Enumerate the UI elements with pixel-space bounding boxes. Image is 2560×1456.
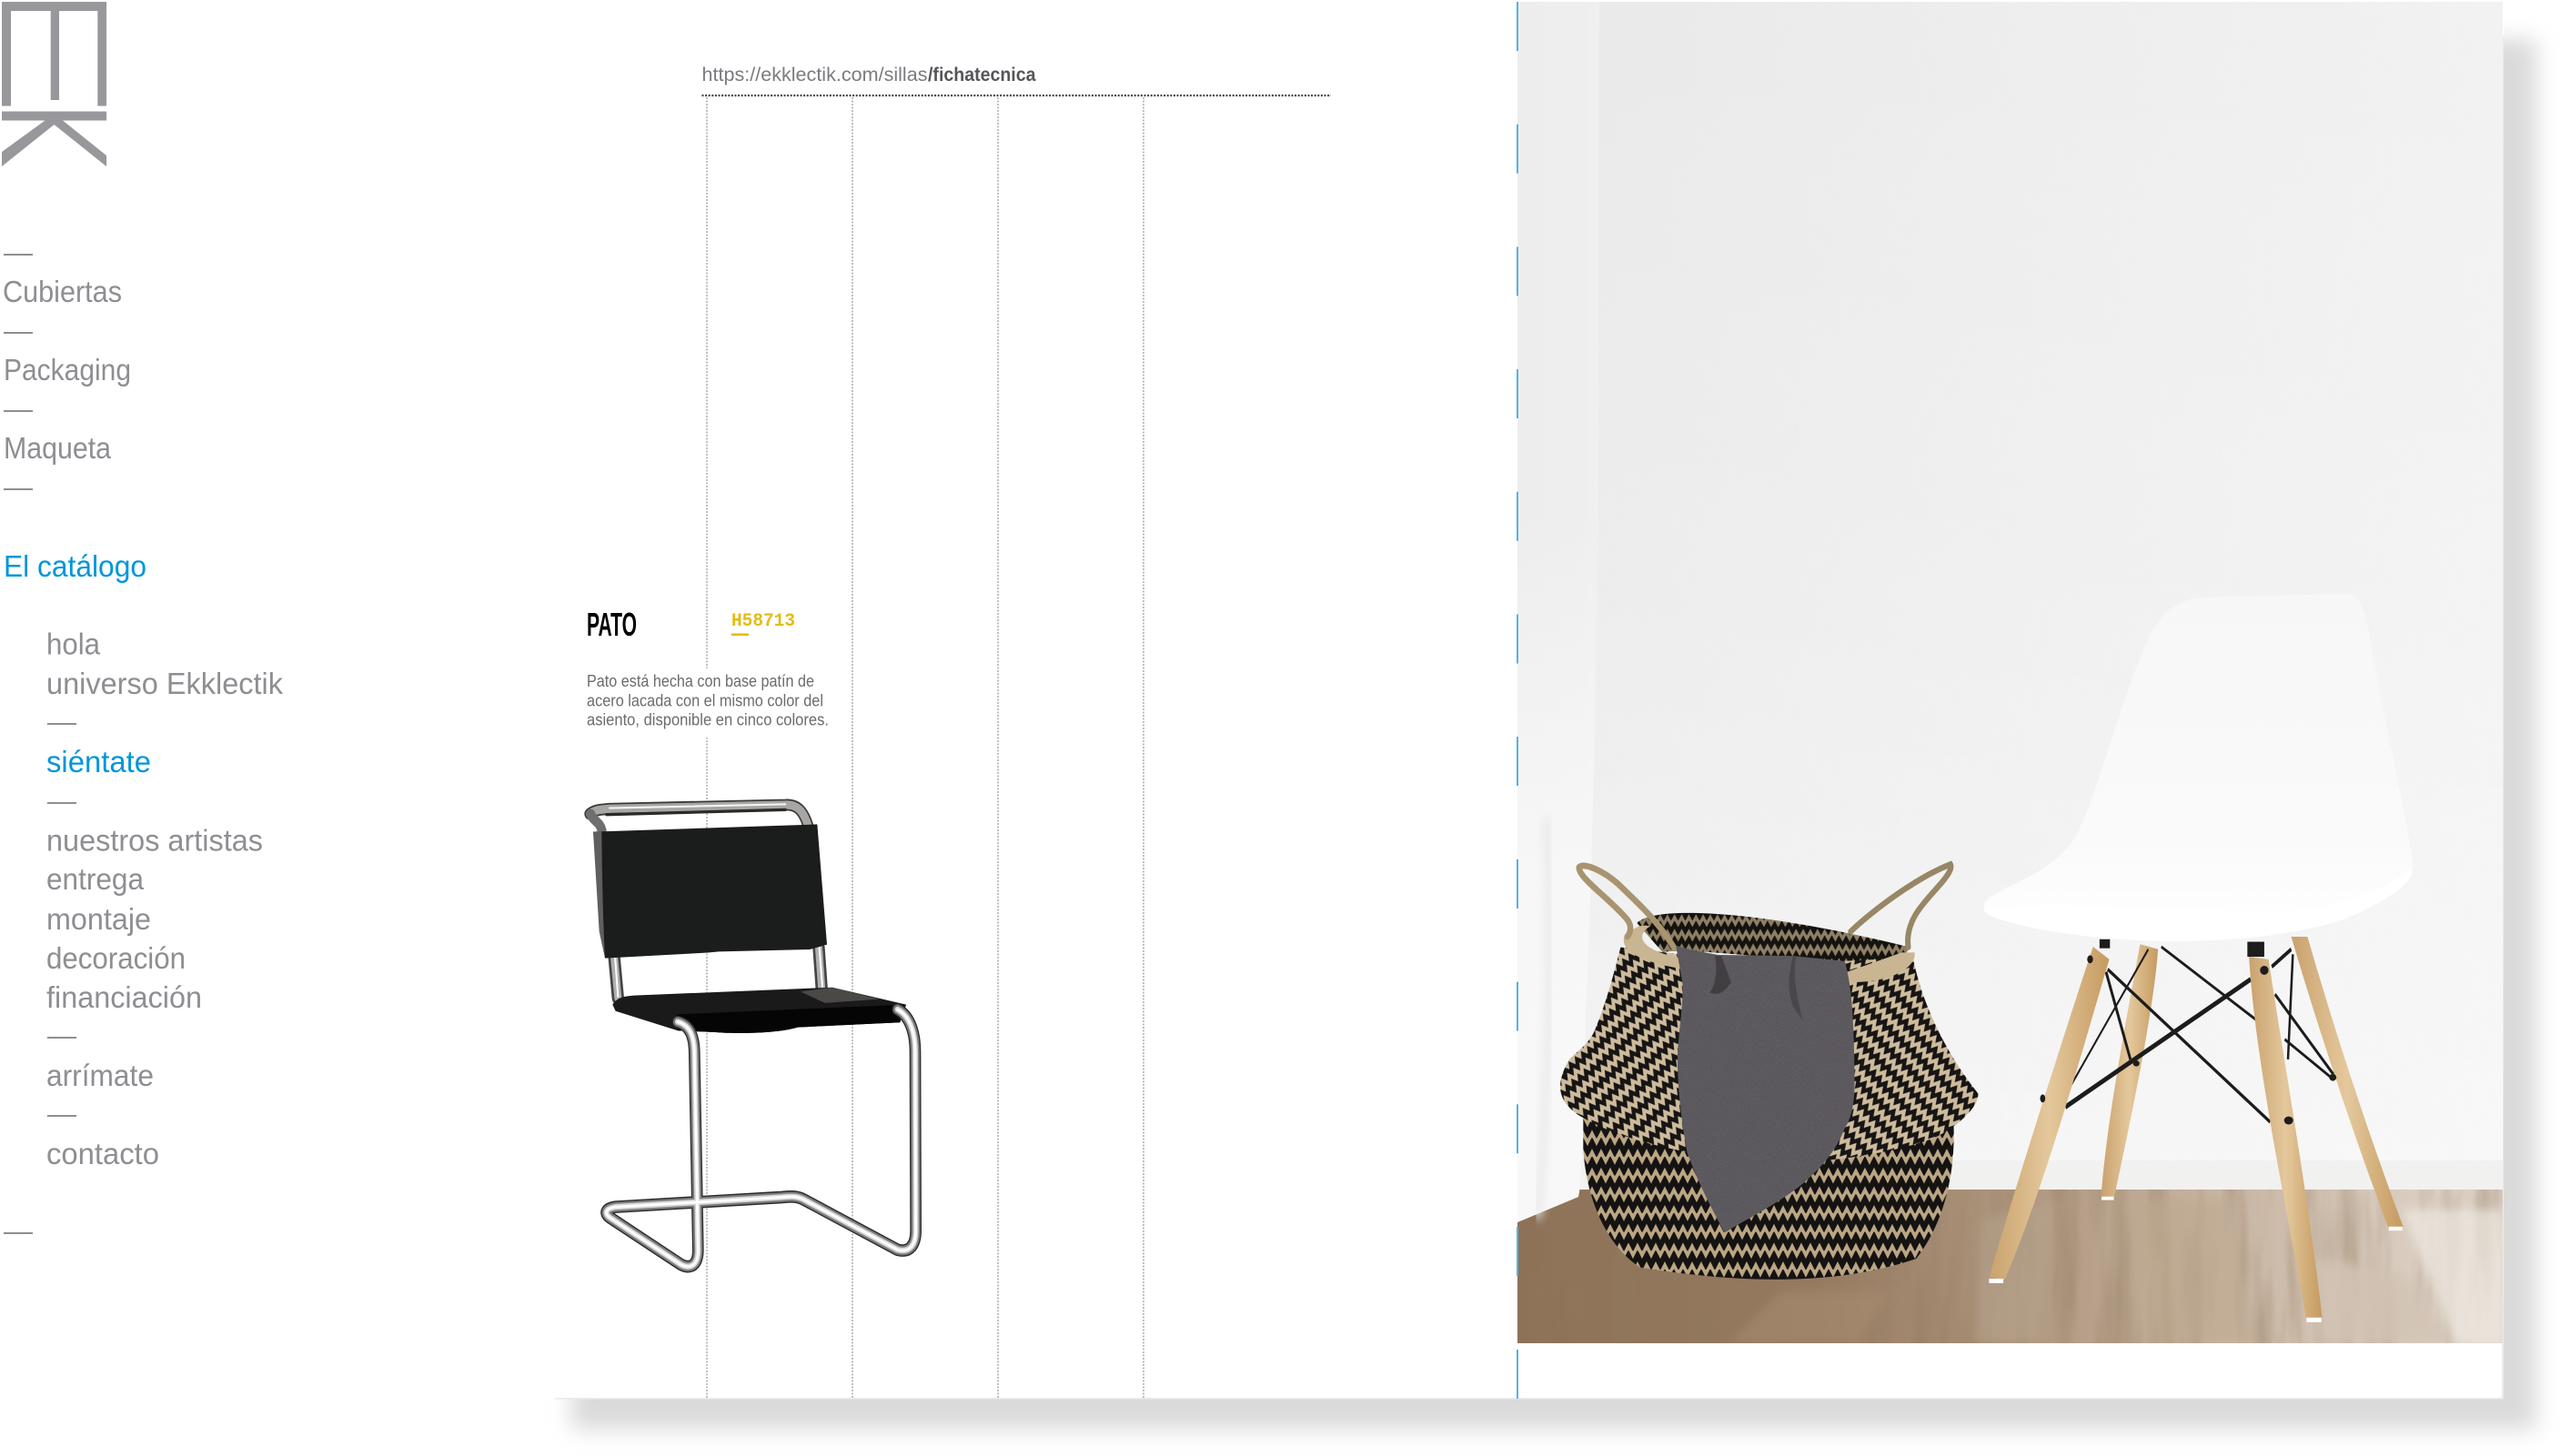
basket upper right body xyxy=(1826,959,1978,1160)
chair frame rear xyxy=(590,804,822,998)
catalog submenu: hola xyxy=(46,628,101,660)
catalog submenu: siéntate xyxy=(46,745,151,778)
wall xyxy=(1517,2,2503,1193)
page drop shadow xyxy=(571,39,2536,1430)
active section: El catálogo: El catálogo xyxy=(4,549,146,583)
chair backrest xyxy=(593,824,827,959)
navigation menu xyxy=(3,254,283,1234)
main menu items: Packaging xyxy=(4,353,131,387)
catalog submenu: financiación xyxy=(46,980,202,1014)
product heading: PATO: PATO xyxy=(587,606,637,643)
url breadcrumb: https://ekklectik.com/sillas xyxy=(702,65,928,85)
floor xyxy=(1517,1190,2503,1343)
product image: black cantilever chair xyxy=(590,804,916,1267)
chair shell xyxy=(1984,840,2394,914)
catalog submenu: montaje xyxy=(46,902,151,936)
catalog submenu: contacto xyxy=(46,1137,159,1170)
chair seat xyxy=(612,988,906,1033)
blue edge ticks xyxy=(1517,2,1518,1399)
chair tubular base xyxy=(607,1009,916,1267)
wicker basket xyxy=(1560,865,1978,1280)
catalog submenu: arrímate xyxy=(46,1059,154,1092)
url breadcrumb xyxy=(702,65,1036,85)
catalog submenu: entrega xyxy=(46,862,145,896)
white shell chair xyxy=(1984,840,2413,1322)
product description: acero lacada con el mismo color del xyxy=(587,691,823,710)
feet xyxy=(1989,1197,2403,1322)
lifestyle photo panel xyxy=(1517,2,2503,1343)
column guides xyxy=(707,97,1144,1399)
product description xyxy=(582,668,842,738)
main menu items: Cubiertas xyxy=(3,275,122,308)
main menu items: Maqueta xyxy=(4,431,112,465)
grey blanket xyxy=(1676,946,1855,1232)
product description: asiento, disponible en cinco colores. xyxy=(587,710,829,729)
bolts xyxy=(2040,939,2336,1124)
url dotted rule xyxy=(702,95,1331,96)
rope handles xyxy=(1579,865,1950,948)
menu separators xyxy=(4,254,76,1234)
baseboard xyxy=(1583,1160,2503,1191)
catalog submenu: nuestros artistas xyxy=(46,824,263,857)
basket rim xyxy=(1624,926,1915,982)
url breadcrumb: /fichatecnica xyxy=(928,65,1036,85)
product description: Pato está hecha con base patín de xyxy=(587,671,814,690)
catalog submenu xyxy=(46,628,283,1170)
basket interior xyxy=(1637,913,1909,961)
product code: H58713 xyxy=(731,611,795,632)
chair legs xyxy=(1989,937,2404,1322)
main menu items xyxy=(3,275,131,465)
basket lower body xyxy=(1583,1114,1954,1280)
curtain xyxy=(1517,785,1592,1224)
cross wires xyxy=(2065,947,2333,1122)
logo: Ekklectik monogram xyxy=(2,2,106,166)
catalog submenu: universo Ekklectik xyxy=(46,667,283,700)
catalog submenu: decoración xyxy=(46,941,186,975)
basket upper left body xyxy=(1560,948,1687,1152)
